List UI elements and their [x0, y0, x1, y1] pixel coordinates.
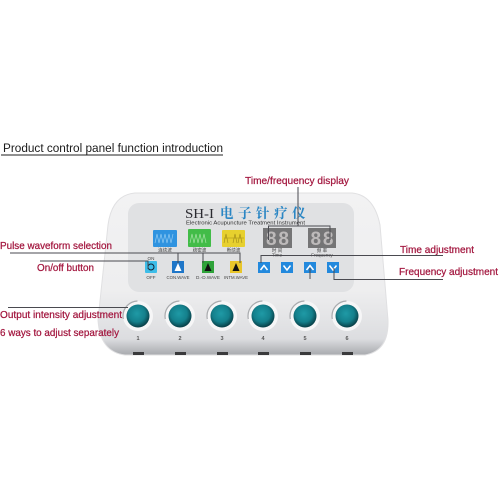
output intensity knobs: 5 [303, 336, 307, 342]
waveform buttons: INTM.WAVE [224, 275, 248, 280]
output intensity knobs: 6 [345, 336, 349, 342]
time/frequency digital displays [263, 228, 336, 258]
power button [145, 256, 157, 280]
time/frequency digital displays: 88 [266, 229, 289, 250]
callout: frequency adjustment: Frequency adjustment [399, 266, 498, 278]
callout: time/frequency display [245, 175, 350, 240]
waveform screens [153, 229, 245, 254]
time/frequency digital displays: Frequency [311, 252, 334, 258]
power button: ON [148, 256, 154, 261]
callout: on/off button [37, 261, 148, 274]
waveform screens: 连续波 [158, 246, 172, 254]
callout: frequency adjustment [310, 266, 498, 280]
callout: on/off button: On/off button [37, 262, 94, 274]
power button: OFF [146, 275, 156, 280]
callout: time adjustment: Time adjustment [400, 244, 474, 256]
model name: SH-I [185, 207, 214, 222]
model name: Electronic Acupuncture Treatment Instrument [186, 220, 305, 226]
callout: output intensity adjustment [0, 308, 128, 339]
waveform buttons [166, 261, 248, 280]
title: Product control panel function introduction [3, 141, 223, 155]
callout: time/frequency display: Time/frequency display [245, 175, 350, 187]
callout: output intensity adjustment: 6 ways to adjust separately [0, 327, 120, 339]
waveform buttons: D.-D.WAVE [196, 275, 220, 280]
callout: pulse waveform selection [0, 240, 240, 263]
device body [98, 193, 388, 355]
waveform screens: 断续波 [227, 246, 241, 254]
waveform buttons: CON.WAVE [166, 275, 190, 280]
output intensity knobs: 3 [220, 336, 224, 342]
control panel inset [128, 203, 354, 292]
callout: pulse waveform selection: Pulse waveform selection [0, 240, 112, 252]
output intensity knobs: 4 [261, 336, 265, 342]
output intensity knobs: 1 [136, 336, 140, 342]
waveform screens: 疏密波 [193, 246, 207, 254]
adjustment arrow buttons [258, 262, 339, 273]
output intensity knobs: 2 [178, 336, 182, 342]
time/frequency digital displays: 频 率 [317, 247, 328, 254]
time/frequency digital displays: Time [272, 252, 282, 258]
output intensity knobs [123, 301, 362, 342]
callout: time adjustment [261, 244, 474, 263]
time/frequency digital displays: 88 [310, 229, 334, 250]
time/frequency digital displays: 时 间 [272, 247, 283, 254]
model name: 电子针疗仪 [220, 202, 310, 222]
callout: output intensity adjustment: Output intensity adjustment [0, 309, 122, 321]
model name [185, 202, 310, 226]
